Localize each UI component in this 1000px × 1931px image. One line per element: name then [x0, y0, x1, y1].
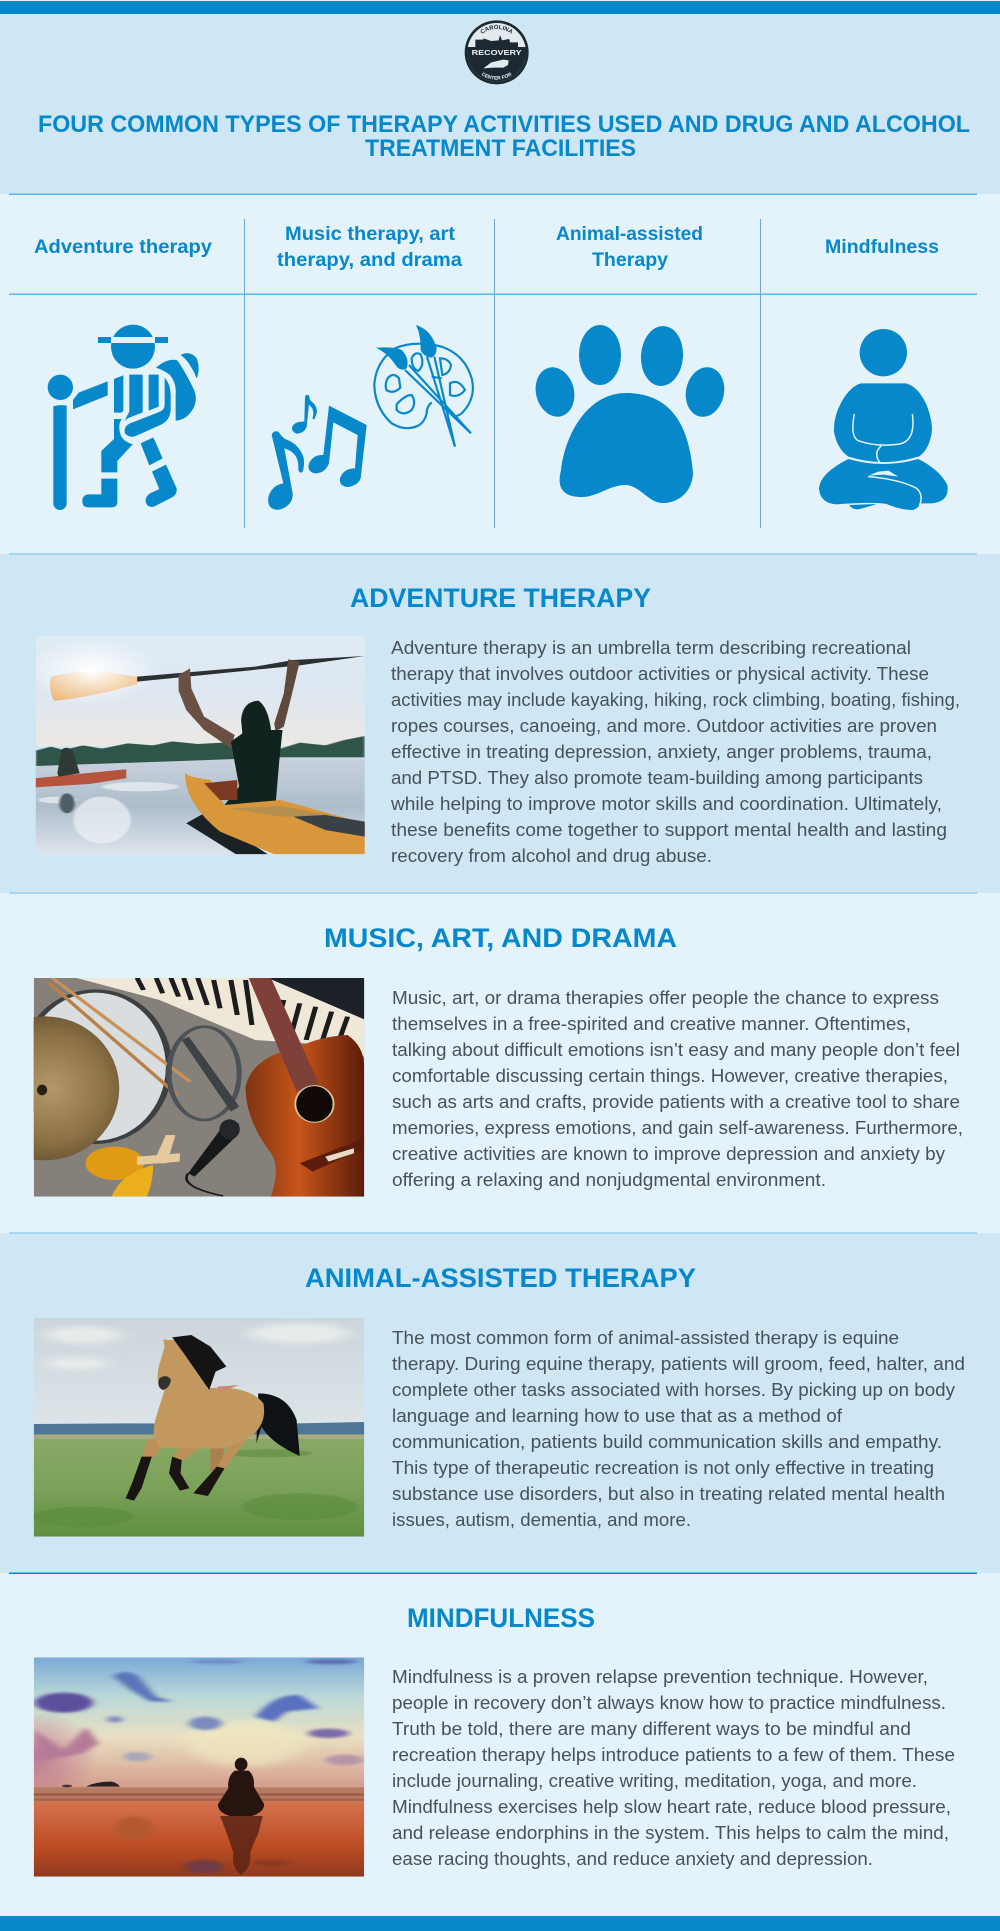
logo: Carolina Recovery Center: [464, 20, 529, 84]
bottom bar: [0, 1916, 1000, 1931]
text: adventure therapy description: ropes courses, canoeing, and more. Outdoor activities are proven: [391, 716, 937, 736]
heading: music, art, and drama: MUSIC, ART, AND DRAMA: [324, 923, 677, 953]
photo: musical instruments: [0, 978, 364, 1197]
text: adventure therapy description: activities may include kayaking, hiking, rock climbing, boating, fishing,: [391, 690, 960, 710]
column heading: mindfulness: Mindfulness: [825, 237, 939, 258]
top bar: [0, 1, 1000, 14]
text: animal-assisted therapy description: therapy. During equine therapy, patients will groom, feed, halter, and: [392, 1354, 965, 1374]
text: music, art, and drama description: Music, art, or drama therapies offer people the chance to express: [392, 988, 939, 1008]
text: mindfulness description: [392, 1667, 955, 1869]
title: FOUR COMMON TYPES OF THERAPY ACTIVITIES USED AND DRUG AND ALCOHOL: [38, 111, 970, 138]
text: music, art, and drama description: memories, express emotions, and gain self-awareness. Furthermore,: [392, 1118, 963, 1138]
panel: adventure therapy: [0, 553, 1000, 893]
text: mindfulness description: Mindfulness is a proven relapse prevention technique. However,: [392, 1667, 928, 1687]
panel: mindfulness: [34, 1608, 954, 1877]
icon: meditating person: [819, 329, 948, 510]
text: music, art, and drama description: [392, 988, 963, 1190]
text: adventure therapy description: while helping to improve motor skills and coordination. Ultimately,: [390, 794, 942, 814]
text: mindfulness description: recreation therapy helps introduce patients to a few of them. These: [392, 1745, 955, 1765]
text: animal-assisted therapy description: complete other tasks associated with horses. By picking up on body: [392, 1380, 955, 1400]
logo: Carolina Recovery Center: CENTER FOR: [482, 72, 512, 80]
panel: header: [0, 14, 1000, 194]
logo: Carolina Recovery Center: CAROLINA: [480, 24, 512, 34]
text: mindfulness description: Truth be told, there are many different ways to be mindful and: [392, 1719, 911, 1739]
photo: kayaking: [26, 636, 365, 854]
text: animal-assisted therapy description: The most common form of animal-assisted therapy is equine: [392, 1328, 899, 1348]
text: adventure therapy description: Adventure therapy is an umbrella term describing recreational: [391, 638, 911, 658]
column heading: music therapy: [277, 224, 462, 271]
heading: adventure therapy: ADVENTURE THERAPY: [350, 583, 651, 613]
photo: horse: [32, 1318, 364, 1537]
column heading: music therapy: therapy, and drama: [277, 250, 462, 271]
title: [38, 111, 970, 162]
text: mindfulness description: Mindfulness exercises help slow heart rate, reduce blood pressure,: [392, 1797, 951, 1817]
title: TREATMENT FACILITIES: [365, 135, 636, 162]
text: music, art, and drama description: talking about difficult emotions isn’t easy and many people don’t feel: [392, 1040, 960, 1060]
icon: hiker: [48, 325, 199, 510]
text: animal-assisted therapy description: communication, patients build communication skills and empathy.: [392, 1432, 942, 1452]
icon: paw print: [531, 325, 729, 503]
text: adventure therapy description: recovery from alcohol and drug abuse.: [391, 846, 712, 866]
text: music, art, and drama description: such as arts and crafts, provide patients with a creative tool to share: [392, 1092, 960, 1112]
panel: music, art, and drama: [9, 892, 977, 1197]
icon: music notes and palette: [268, 325, 473, 510]
text: animal-assisted therapy description: This type of therapeutic recreation is not only effective in treating: [392, 1458, 934, 1478]
text: animal-assisted therapy description: language and learning how to use that as a method of: [392, 1406, 843, 1426]
column heading: music therapy: Music therapy, art: [285, 224, 456, 245]
text: adventure therapy description: and PTSD. They also promote team-building among participants: [391, 768, 923, 788]
text: animal-assisted therapy description: [392, 1328, 965, 1530]
text: animal-assisted therapy description: issues, autism, dementia, and more.: [392, 1510, 691, 1530]
text: adventure therapy description: [390, 638, 960, 866]
text: music, art, and drama description: creative activities are known to improve depression and anxiety by: [392, 1144, 945, 1164]
heading: mindfulness: MINDFULNESS: [407, 1603, 595, 1633]
panel: overview table: [0, 194, 1000, 554]
text: adventure therapy description: therapy that involves outdoor activities or physical activity. These: [391, 664, 929, 684]
column heading: animal-assisted: Therapy: [592, 250, 668, 271]
text: animal-assisted therapy description: substance use disorders, but also in treating related mental health: [392, 1484, 945, 1504]
column heading: animal-assisted: [556, 224, 703, 271]
text: music, art, and drama description: comfortable discussing certain things. However, creative therapies,: [392, 1066, 948, 1086]
text: adventure therapy description: effective in treating depression, anxiety, anger problems, trauma,: [391, 742, 932, 762]
text: music, art, and drama description: offering a relaxing and nonjudgmental environment.: [392, 1170, 826, 1190]
photo: meditation at sunset: [34, 1657, 364, 1877]
text: mindfulness description: include journaling, creative writing, meditation, yoga, and more.: [392, 1771, 917, 1791]
text: mindfulness description: and release endorphins in the system. This helps to calm the mind,: [392, 1823, 949, 1843]
heading: animal-assisted therapy: ANIMAL-ASSISTED THERAPY: [305, 1263, 696, 1293]
column heading: animal-assisted: Animal-assisted: [556, 224, 703, 245]
text: mindfulness description: people in recovery don’t always know how to practice mindfulness.: [392, 1693, 946, 1713]
text: mindfulness description: ease racing thoughts, and reduce anxiety and depression.: [392, 1849, 873, 1869]
text: music, art, and drama description: themselves in a free-spirited and creative manner. Oftentimes,: [392, 1014, 911, 1034]
logo: Carolina Recovery Center: RECOVERY: [472, 48, 522, 57]
text: adventure therapy description: these benefits come together to support mental health and lasting: [391, 820, 947, 840]
column heading: adventure therapy: Adventure therapy: [34, 237, 212, 258]
panel: animal-assisted therapy: [0, 1232, 1000, 1574]
